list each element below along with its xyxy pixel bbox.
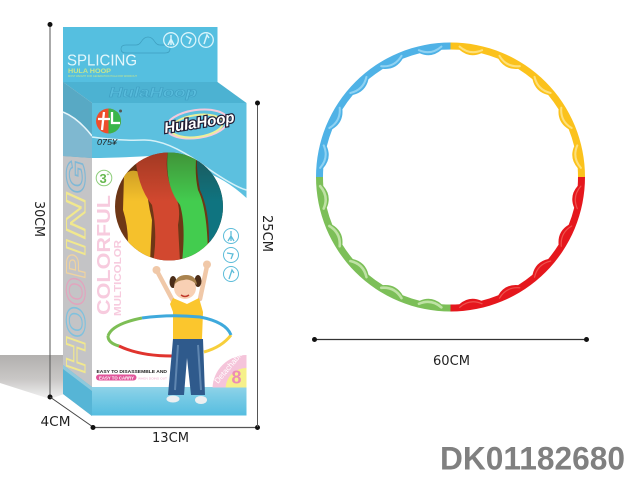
dimension: depth 4cm: 4CM	[40, 414, 70, 430]
product code: DK01182680	[440, 440, 625, 476]
child figure	[152, 260, 211, 404]
tab small print: MOST WEIGHT FOR GENERATION HULA FOR WORKOUT	[68, 75, 138, 78]
pill: easy to carry: EASY TO CARRY	[99, 376, 134, 380]
side title: hooping: N	[61, 193, 91, 239]
ring: blue segment	[316, 42, 450, 177]
age badge 3+: +	[106, 172, 110, 178]
side title: hooping: O	[61, 307, 91, 338]
front arc of toy hoop behind legs	[108, 335, 231, 356]
subheading: hula hoop: HULA HOOP	[68, 68, 112, 75]
side title: hooping: I	[61, 240, 91, 255]
dimension: depth 4cm	[40, 397, 93, 430]
dimension: diameter 60cm: 60CM	[433, 353, 470, 369]
dimension: width 13cm	[90, 425, 260, 446]
product window	[115, 150, 224, 262]
panel: box side face	[61, 82, 92, 416]
panel: hang tab	[63, 27, 218, 83]
product box	[63, 27, 246, 416]
badge: detachable 8: 8	[232, 368, 242, 388]
side title: hooping	[61, 160, 91, 373]
floor shadow	[0, 355, 64, 399]
dimension: front height 25cm: 25CM	[259, 215, 274, 252]
ring: red segment	[450, 177, 585, 312]
vertical text: colorful: COLORFUL	[93, 195, 114, 315]
logo code: 075¥	[97, 138, 119, 147]
panel: box top face	[63, 82, 246, 103]
vertical text: multicolor: MULTICOLOR	[112, 240, 124, 316]
side title: hooping: P	[61, 254, 91, 278]
dimension: front height 25cm	[255, 100, 274, 427]
panel: box top face: HulaHoop	[109, 84, 198, 100]
age badge 3+: 3	[100, 171, 107, 186]
dimension: diameter 60cm	[312, 337, 589, 369]
sport icons	[224, 228, 238, 282]
dimension: width 13cm: 13CM	[152, 430, 189, 446]
panel: box front face	[92, 103, 246, 416]
dimension: height 30cm	[31, 22, 52, 400]
ring: yellow segment	[450, 42, 585, 177]
badge: detachable 8: Detachable	[213, 348, 246, 385]
age badge 3+	[96, 170, 112, 186]
side title: hooping: G	[61, 160, 91, 194]
icon: logo	[96, 108, 122, 134]
hula hoop ring	[316, 42, 585, 312]
bottom colour band	[92, 387, 246, 416]
small print: when doing: WHEN DOING OUT	[138, 376, 167, 380]
side title: hooping: H	[61, 337, 91, 373]
back arc of toy hoop over shirt	[108, 316, 231, 336]
side title: hooping: O	[61, 278, 91, 306]
icon: sport badges on tab	[164, 33, 213, 47]
dimension: height 30cm: 30CM	[31, 201, 46, 237]
caption: easy to disassemble: EASY TO DISASSEMBLE AND	[96, 369, 168, 375]
ring: green segment	[316, 177, 450, 312]
heading: splicing: SPLICING	[67, 52, 137, 70]
brand logo: hula hoop: HulaHoop	[163, 109, 236, 137]
